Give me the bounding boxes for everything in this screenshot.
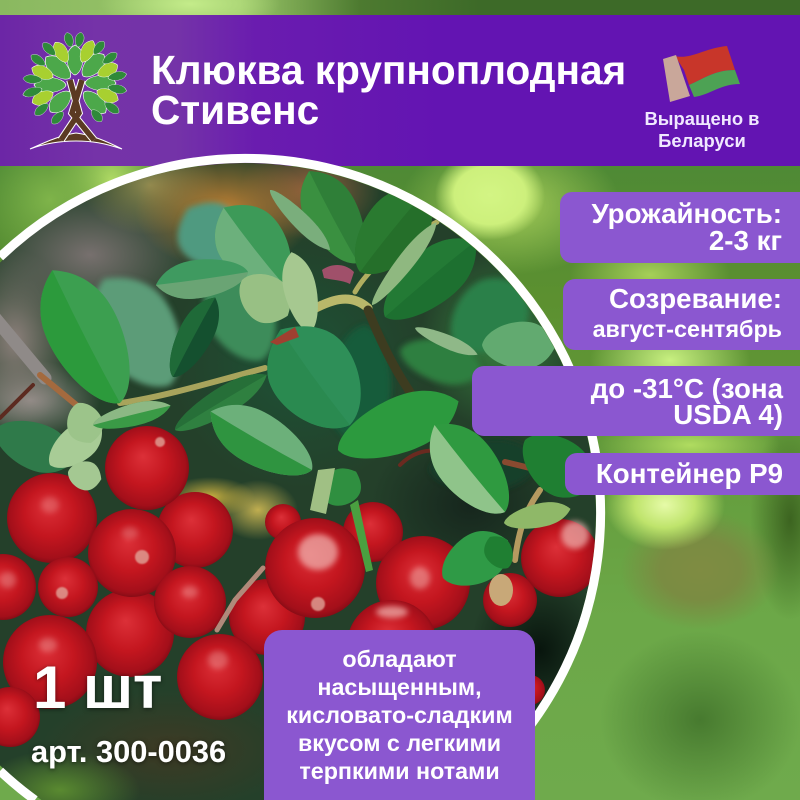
icon: Belarus flag: [663, 46, 740, 102]
panel: yield: Урожайность:: [592, 198, 782, 229]
panel: container: [565, 453, 800, 495]
panel: ripening: Созревание:: [609, 283, 782, 314]
panel: yield: [560, 192, 800, 263]
panel: container: Контейнер P9: [596, 458, 783, 489]
blurred back leaves: [96, 199, 531, 486]
panel: taste description: насыщенным,: [317, 674, 482, 700]
berries: [0, 426, 599, 747]
grown in Belarus caption: Беларуси: [658, 130, 746, 151]
panel: frost hardiness: USDA 4): [673, 399, 783, 430]
title second line: Стивенс: [151, 87, 319, 133]
panel: ripening: [563, 279, 800, 350]
panel: taste description: вкусом с легкими: [298, 730, 501, 756]
header band: [0, 15, 800, 166]
panel: frost hardiness: [472, 366, 800, 436]
branch twigs: [0, 222, 540, 560]
panel: frost hardiness: до -31°C (зона: [591, 373, 784, 404]
panel: yield: 2-3 кг: [709, 225, 782, 256]
panel: taste description: обладают: [342, 646, 457, 672]
panel: taste description: [264, 630, 535, 800]
article number: арт. 300-0036: [31, 734, 226, 769]
grown in Belarus caption: [645, 108, 759, 151]
round photo of cranberry branch: [0, 159, 607, 747]
grown in Belarus caption: Выращено в: [645, 108, 759, 129]
panel: ripening: август-сентябрь: [593, 316, 782, 342]
white circle outline: [0, 158, 601, 800]
icon: tree logo: [22, 31, 127, 149]
panel: taste description: кисловато-сладким: [286, 702, 513, 728]
product title: Клюква крупноплодная: [151, 47, 626, 93]
front leaves: [0, 159, 607, 599]
quantity label: 1 шт: [33, 654, 162, 721]
photo background blur inside circle: [0, 163, 596, 800]
panel: taste description: терпкими нотами: [299, 758, 500, 784]
